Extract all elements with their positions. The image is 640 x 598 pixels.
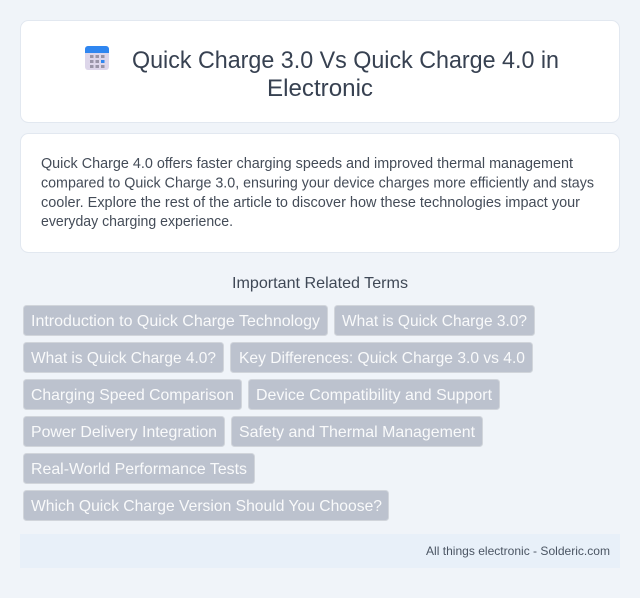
icon: calendar xyxy=(85,46,109,70)
tag: real-world: Real-World Performance Tests xyxy=(31,461,247,478)
tag: which version xyxy=(24,490,388,520)
panel: title card xyxy=(20,20,620,122)
tag list xyxy=(24,306,534,520)
tag: device compatibility xyxy=(248,380,500,410)
title xyxy=(132,47,559,102)
heading: related terms: Important Related Terms xyxy=(232,275,408,292)
tag: real-world xyxy=(24,454,254,484)
tag: key differences: Key Differences: Quick Charge 3.0 vs 4.0 xyxy=(239,350,525,367)
tag: safety: Safety and Thermal Management xyxy=(239,424,476,441)
tag: what is 3.0 xyxy=(334,306,534,336)
tag: device compatibility: Device Compatibility and Support xyxy=(256,387,493,404)
tag: introduction: Introduction to Quick Charge Technology xyxy=(31,313,320,330)
summary text: cooler. Explore the rest of the article to discover how these technologies impact your xyxy=(41,195,580,211)
tag: power delivery: Power Delivery Integration xyxy=(31,424,217,441)
tag: which version: Which Quick Charge Version Should You Choose? xyxy=(31,498,382,515)
tag: introduction xyxy=(24,306,328,336)
tag: what is 4.0: What is Quick Charge 4.0? xyxy=(31,350,216,367)
panel: summary xyxy=(20,134,620,252)
summary text: Quick Charge 4.0 offers faster charging speeds and improved thermal management xyxy=(41,156,573,172)
footer xyxy=(20,534,620,568)
title: Electronic xyxy=(267,75,373,102)
summary text: everyday charging experience. xyxy=(41,214,233,230)
tag: power delivery xyxy=(24,416,224,446)
tag: key differences xyxy=(230,342,532,372)
tag: charging speed: Charging Speed Comparison xyxy=(31,387,234,404)
tag: safety xyxy=(232,416,482,446)
summary text: compared to Quick Charge 3.0, ensuring your device charges more efficiently and stays xyxy=(41,176,594,192)
tag: charging speed xyxy=(24,380,242,410)
tag: what is 4.0 xyxy=(24,342,224,372)
title: Quick Charge 3.0 Vs Quick Charge 4.0 in xyxy=(132,47,559,74)
summary text xyxy=(41,156,594,230)
tag: what is 3.0: What is Quick Charge 3.0? xyxy=(342,313,527,330)
footer: All things electronic - Solderic.com xyxy=(426,544,610,558)
